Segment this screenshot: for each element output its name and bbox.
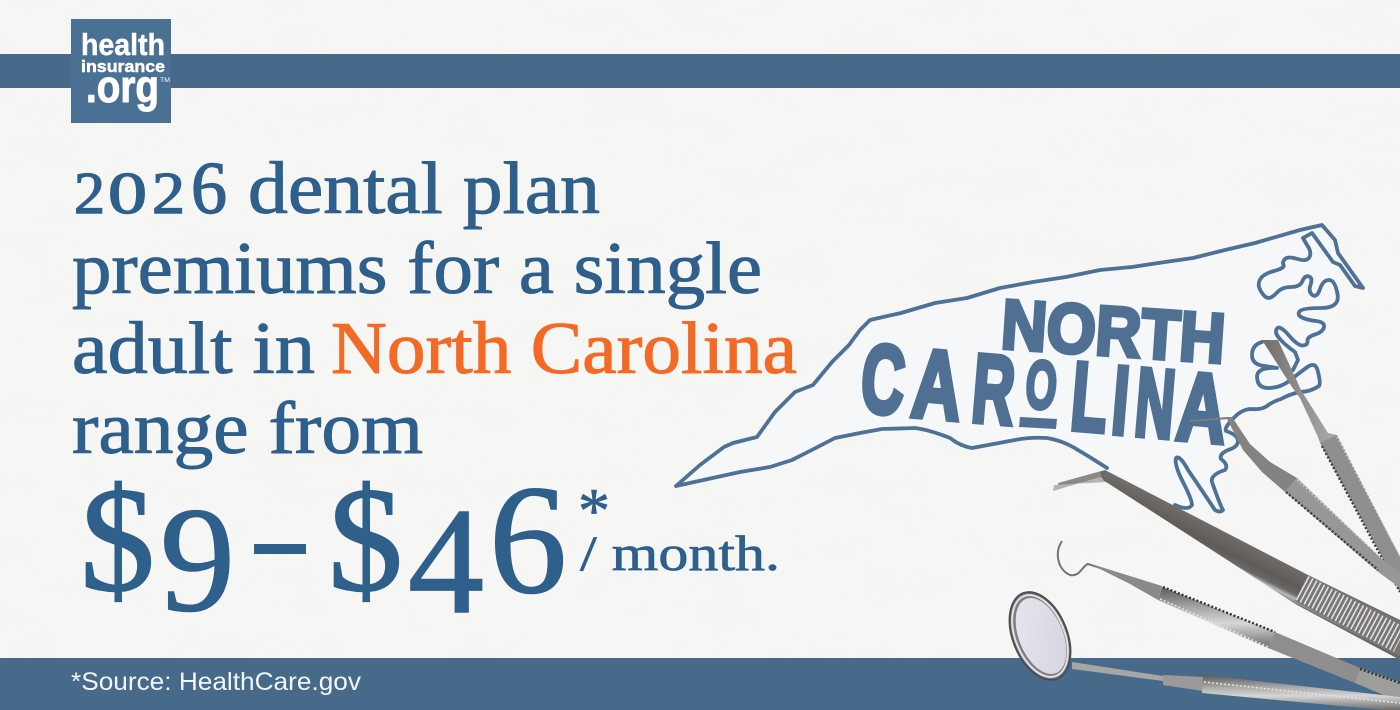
CAROLINA: C <box>857 323 909 435</box>
headline: premiums for a single <box>72 228 762 310</box>
dental instruments <box>998 340 1400 710</box>
logo: healthinsurance.org <box>71 19 171 123</box>
price range <box>80 453 567 645</box>
price range: 9 <box>160 477 235 643</box>
logo: healthinsurance.org: health <box>81 27 165 62</box>
headline: 0 <box>108 160 147 226</box>
headline: dental plan <box>248 148 600 230</box>
instrument: dental mirror <box>998 583 1400 710</box>
state name lettering <box>857 285 1231 464</box>
instrument: tweezers <box>1053 470 1400 660</box>
price range: $ <box>328 457 403 623</box>
CAROLINA: A <box>1173 351 1231 464</box>
highlighted state name: North Carolina <box>331 308 797 390</box>
headline: range from <box>72 388 423 470</box>
top band <box>0 54 1400 88</box>
North Carolina state outline <box>676 225 1363 512</box>
CAROLINA: R <box>968 333 1019 445</box>
headline: 6 <box>191 148 227 230</box>
price range: $ <box>80 457 155 623</box>
asterisk: * <box>578 475 610 546</box>
instrument: spatula <box>1262 340 1400 592</box>
CAROLINA: A <box>908 328 966 441</box>
CAROLINA: L <box>1067 341 1112 453</box>
logo: healthinsurance.org: .org <box>86 61 159 112</box>
instrument: hook probe <box>1058 541 1400 702</box>
CAROLINA: N <box>1131 347 1179 459</box>
logo: healthinsurance.org: insurance <box>81 57 165 76</box>
price range: 4 <box>408 477 484 645</box>
CAROLINA: O <box>1023 346 1060 424</box>
headline: adult in <box>72 308 315 390</box>
CAROLINA: I <box>1108 345 1133 455</box>
headline <box>72 148 797 470</box>
per month label: / month. <box>580 525 780 581</box>
logo: healthinsurance.org: TM <box>160 77 170 84</box>
footer band <box>0 658 1400 710</box>
headline: 2 <box>74 160 105 226</box>
headline: 2 <box>152 160 185 226</box>
instrument: angled explorer <box>1190 417 1400 588</box>
NORTH: NORTH <box>999 285 1228 378</box>
source note: *Source: HealthCare.gov <box>71 668 362 696</box>
CAROLINA <box>857 323 1231 464</box>
price range: 6 <box>489 453 567 626</box>
